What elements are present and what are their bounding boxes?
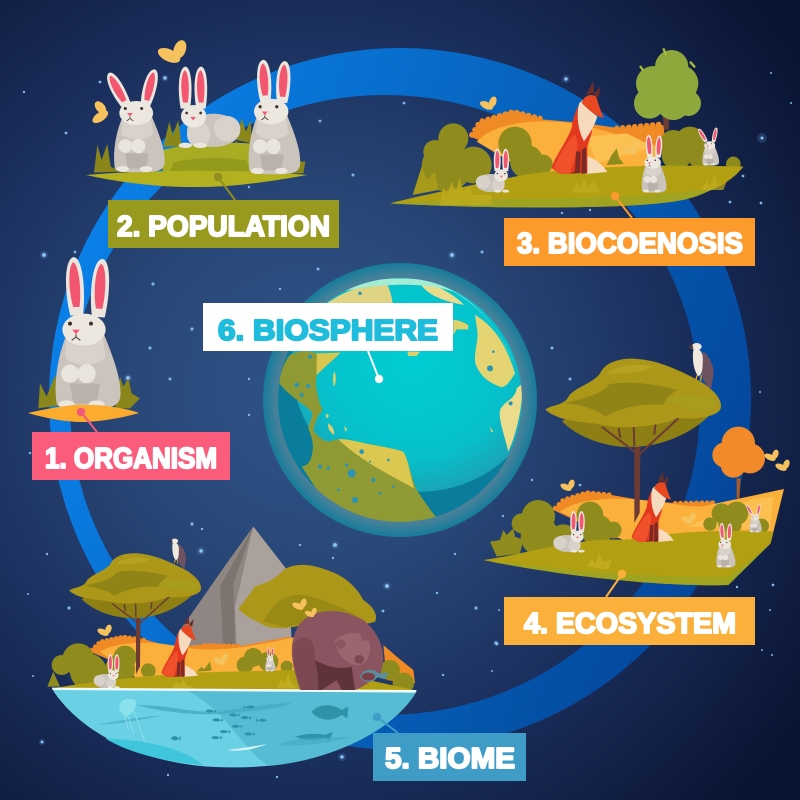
rabbit right (249, 59, 300, 174)
rabbit left (103, 68, 165, 172)
water (52, 688, 417, 767)
label: 4. Ecosystem: 4. ECOSYSTEM (524, 608, 736, 640)
butterflies (96, 598, 318, 666)
bushes (512, 500, 769, 556)
butterflies (84, 38, 189, 129)
fox (632, 472, 674, 542)
eagle (688, 343, 714, 390)
fox (161, 616, 198, 677)
panel: ecosystem island (483, 343, 791, 597)
label: 2. Population (108, 200, 339, 248)
bushes (52, 643, 414, 694)
orange back (90, 636, 298, 678)
connector (606, 570, 626, 597)
eagle (169, 539, 186, 570)
blue orbit ring (49, 48, 751, 750)
ground (52, 670, 417, 691)
acacia tree (69, 553, 201, 674)
connector (77, 408, 97, 432)
connector (611, 192, 632, 218)
orange back hill (553, 492, 720, 538)
panel: organism island (28, 257, 140, 432)
label: 1. Organism: 1. ORGANISM (45, 443, 217, 475)
ground (28, 405, 139, 422)
jellyfish (119, 699, 145, 742)
rabbits (553, 511, 585, 553)
fox (552, 81, 607, 174)
fish school (171, 705, 267, 741)
grass tufts (94, 118, 305, 173)
butterflies (559, 449, 791, 525)
label: 1. Organism (32, 432, 230, 480)
panel: biocoenosis island (390, 48, 743, 218)
label: 5. Biome: 5. BIOME (385, 743, 515, 775)
rabbit (56, 257, 121, 409)
globe halo (263, 263, 537, 537)
globe sphere (278, 278, 522, 522)
mountain (177, 527, 292, 652)
bear (292, 611, 383, 690)
bushes (422, 123, 741, 192)
label: 3. Biocoenosis: 3. BIOCOENOSIS (517, 228, 743, 260)
rabbit lying (179, 67, 240, 148)
label: 6. Biosphere: 6. BIOSPHERE (218, 315, 438, 347)
fish in bear's mouth (360, 670, 388, 682)
ground (390, 166, 743, 207)
label: 6. Biosphere (203, 303, 453, 351)
panel: biome island (47, 527, 417, 767)
orange tree (737, 478, 741, 498)
globe (263, 263, 537, 537)
second tree (238, 565, 376, 628)
connector (373, 713, 398, 733)
acacia tree (545, 359, 721, 523)
tree (663, 115, 669, 130)
connector: biosphere (368, 351, 383, 383)
rabbits (94, 654, 120, 688)
rabbits (476, 149, 509, 193)
large fish (278, 705, 353, 745)
butterflies (479, 95, 641, 157)
ground (483, 489, 784, 585)
panel: population island (84, 38, 307, 200)
orange back hill (470, 111, 667, 168)
label: 2. Population: 2. POPULATION (117, 211, 330, 243)
label: 3. Biocoenosis (504, 218, 755, 266)
label: 4. Ecosystem (504, 597, 755, 645)
connector (214, 173, 235, 200)
label: 5. Biome (373, 733, 526, 781)
